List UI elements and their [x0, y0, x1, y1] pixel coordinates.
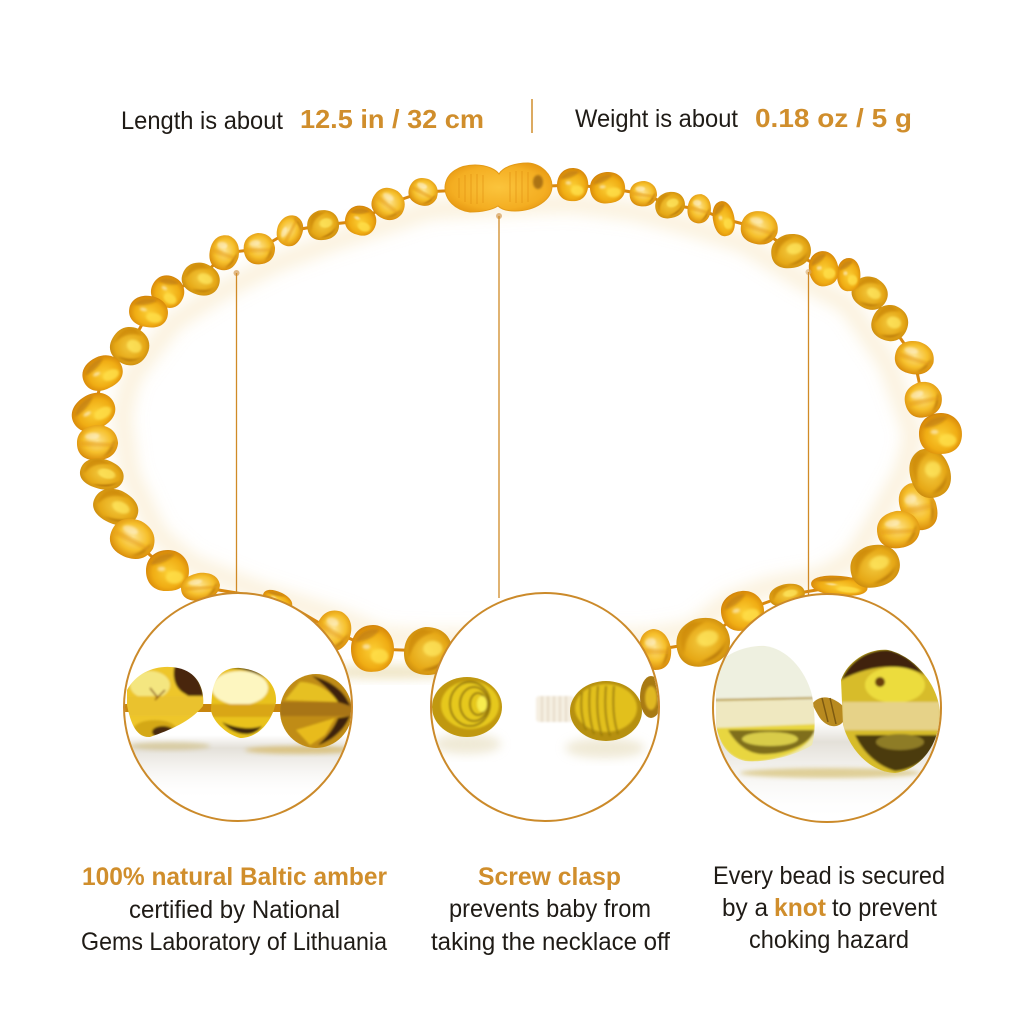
left beads: [65, 174, 442, 603]
circle outline: amber: [124, 593, 352, 821]
caption: knot: by a: [722, 894, 768, 922]
right clasp bead: [570, 681, 642, 741]
bead B: [211, 668, 276, 738]
reflection: [130, 738, 346, 776]
header divider: [531, 99, 533, 133]
left bead: [716, 646, 815, 762]
partial next bead: [640, 676, 658, 718]
caption: knot: Every bead is secured: [713, 862, 945, 890]
pointer line: knot: [806, 269, 812, 596]
caption: clasp: taking the necklace off: [431, 928, 670, 956]
knot: [812, 697, 843, 726]
caption: amber: Gems Laboratory of Lithuania: [81, 928, 387, 956]
circle: amber beads closeup: [125, 594, 351, 776]
caption: knot: to prevent: [832, 894, 937, 922]
bottom beads: [260, 574, 868, 675]
cord and knots: [125, 704, 352, 712]
necklace soft shadow: [122, 203, 914, 679]
header: length: [121, 104, 484, 135]
necklace: [65, 163, 962, 675]
circle: screw clasp closeup: [432, 622, 658, 762]
circle outline: clasp: [431, 593, 659, 821]
caption: amber: 100% natural Baltic amber: [82, 863, 387, 891]
caption: amber: certified by National: [129, 896, 340, 924]
header: length: Length is about: [121, 107, 283, 135]
header: length: 12.5 in / 32 cm: [300, 104, 484, 134]
bead A: [127, 666, 204, 737]
screw clasp on necklace: [445, 163, 552, 212]
reflection: [716, 726, 937, 786]
caption: knot: [713, 862, 945, 954]
header: weight: Weight is about: [575, 105, 738, 133]
left clasp bead: [432, 677, 502, 737]
bead C: [280, 674, 351, 748]
circle: knot closeup: [716, 595, 940, 786]
caption: clasp: [431, 863, 670, 956]
header: weight: [575, 103, 912, 133]
necklace cord: [94, 185, 941, 651]
circle outline: knot: [713, 594, 941, 822]
caption: clasp: Screw clasp: [478, 863, 621, 891]
caption: knot: choking hazard: [749, 926, 909, 954]
reflection: [433, 734, 645, 758]
white screw thread: [536, 696, 574, 722]
right bead: [841, 650, 940, 773]
pointer line: amber: [234, 270, 240, 594]
caption: knot: knot: [774, 894, 827, 922]
caption: amber: [81, 863, 387, 956]
pointer line: clasp: [496, 213, 502, 598]
caption: clasp: prevents baby from: [449, 895, 651, 923]
right beads: [556, 167, 962, 593]
header: weight: 0.18 oz / 5 g: [755, 103, 912, 133]
